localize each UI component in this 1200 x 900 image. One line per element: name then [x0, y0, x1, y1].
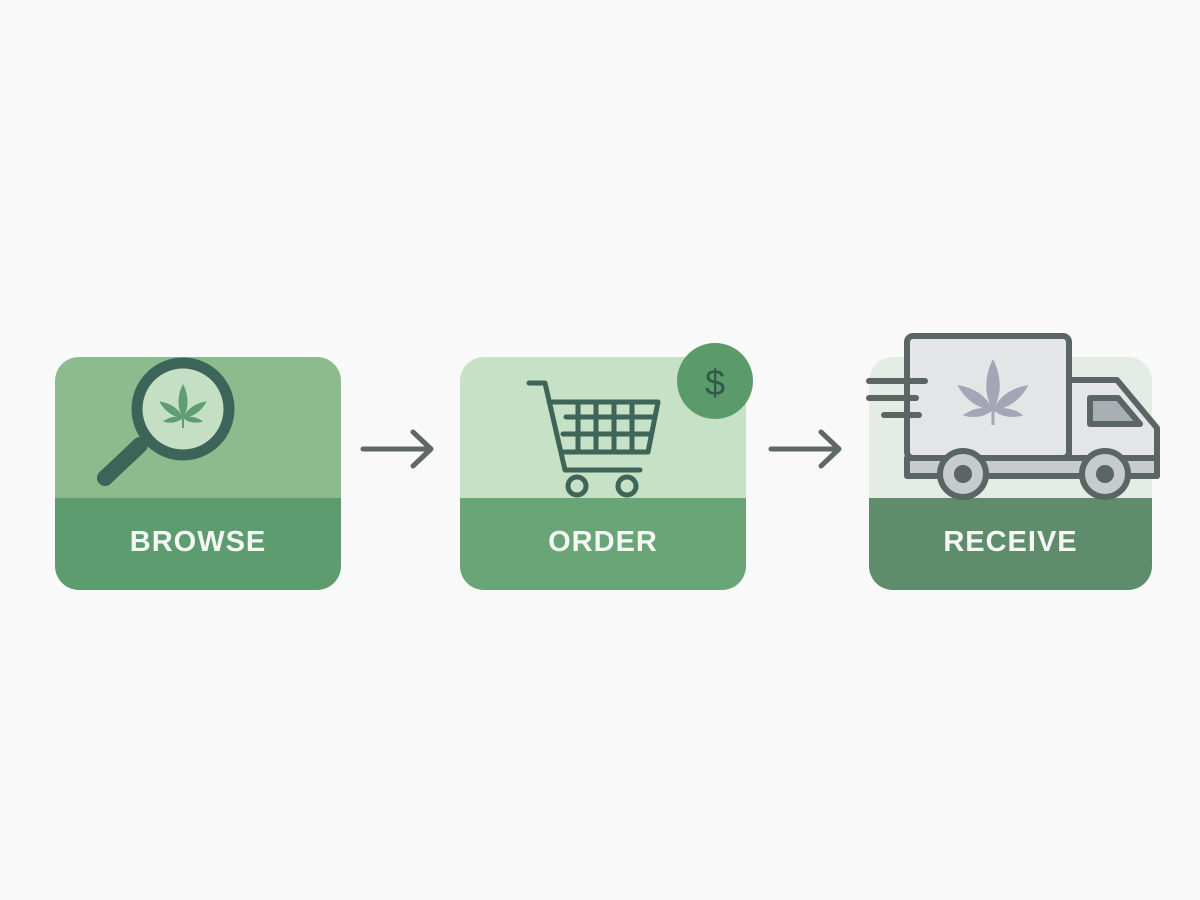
- card: receive: [869, 357, 1152, 590]
- card: browse: [55, 357, 341, 590]
- label: order: [460, 498, 746, 590]
- label: receive: [869, 498, 1152, 590]
- label: browse: [55, 498, 341, 590]
- card: order: [460, 357, 746, 590]
- label: order: ORDER: [548, 526, 658, 558]
- label: receive: RECEIVE: [943, 526, 1078, 558]
- label: browse: BROWSE: [130, 526, 266, 558]
- icon: dollar badge: $: [705, 362, 725, 403]
